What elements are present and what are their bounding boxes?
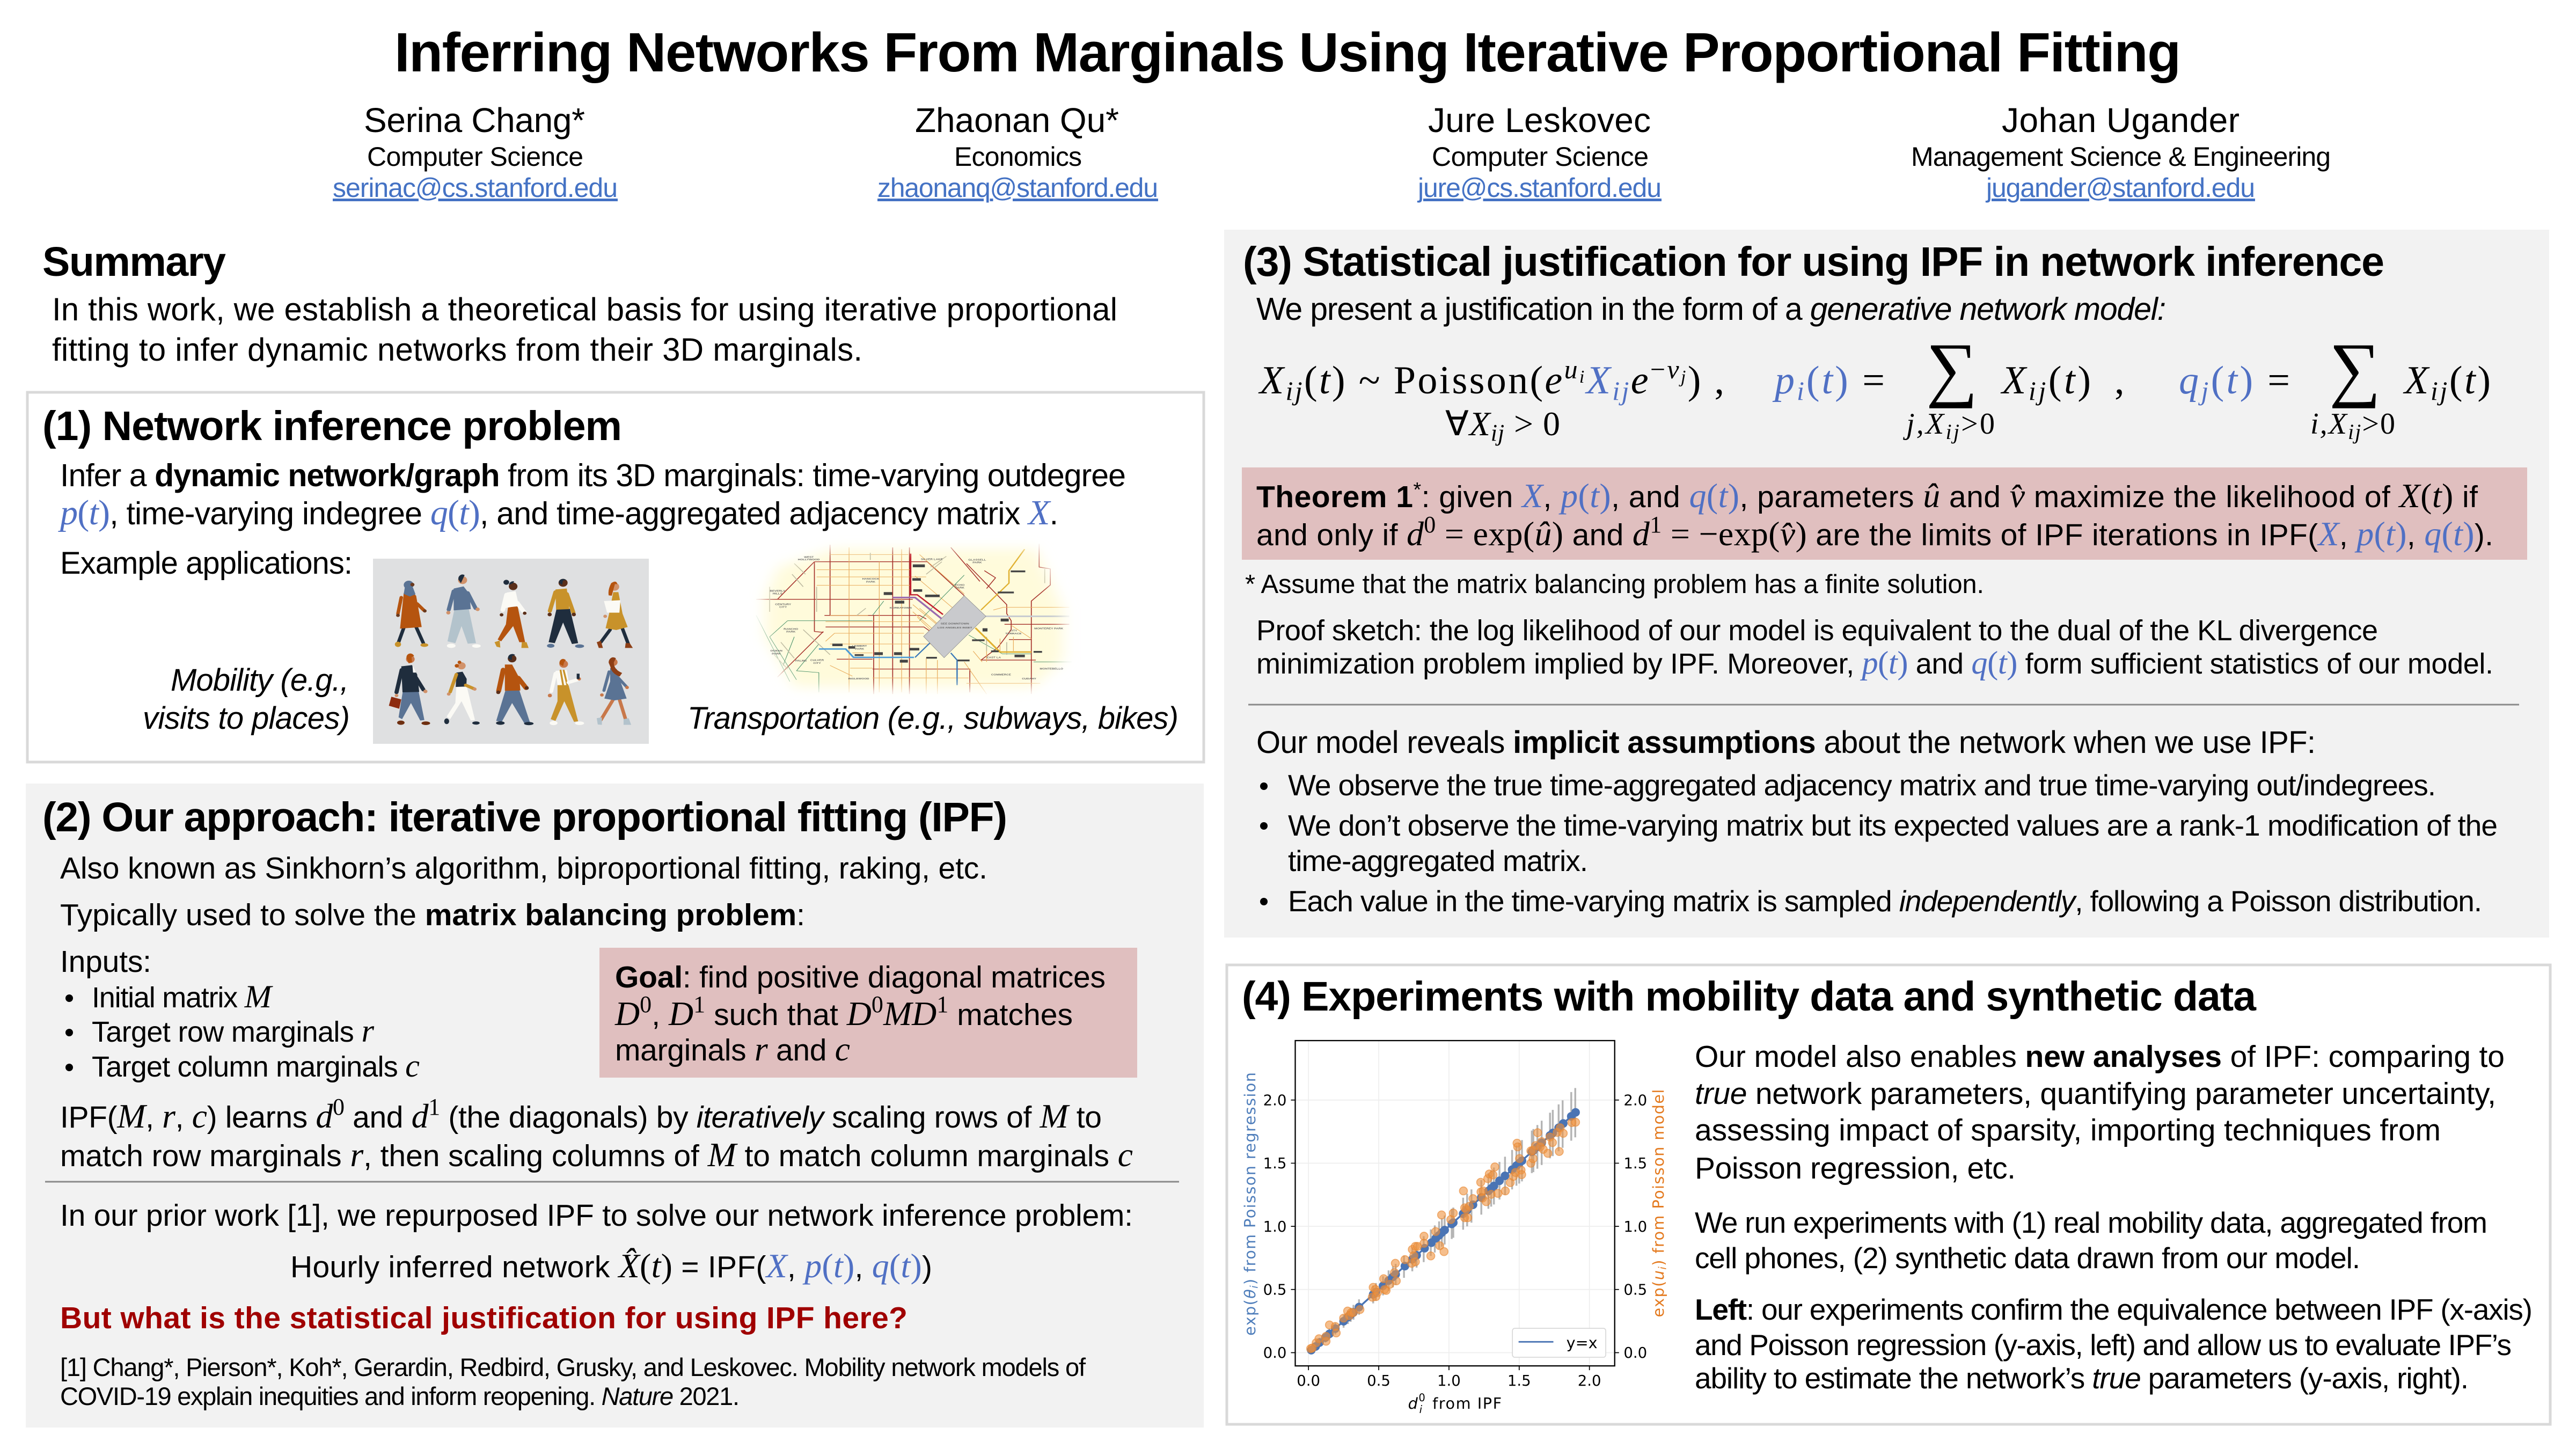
equation: Poisson model: ) , bbox=[1688, 358, 1724, 402]
IPF description: 1 bbox=[428, 1094, 440, 1120]
image: transit map: RANCHO bbox=[784, 628, 799, 631]
image: transit map: CITY bbox=[1009, 630, 1018, 632]
goal callout: 1 bbox=[936, 991, 948, 1018]
matrix balancing intro: Typically used to solve the matrix balancing problem: bbox=[60, 898, 805, 932]
implicit assumptions list: Each value in the time-varying matrix is sampled independently, following a Poisson distribution. bbox=[1288, 884, 2482, 918]
image: transit map: KOREATOWN bbox=[890, 606, 912, 610]
figure 8 bbox=[496, 654, 533, 725]
implicit assumptions list: We observe the true time-aggregated adjacency matrix and true time-varying out/indegrees. bbox=[1288, 769, 2436, 802]
author: Serina Chang: Serina Chang* bbox=[364, 101, 585, 140]
goal callout: D bbox=[846, 994, 872, 1033]
mobility caption: Mobility (e.g., bbox=[171, 663, 349, 698]
description text: Left: our experiments confirm the equivalence between IPF (x-axis) bbox=[1695, 1293, 2533, 1326]
heading: summary: Summary bbox=[42, 239, 226, 285]
equation: Poisson model: X bbox=[1258, 358, 1285, 402]
description text: ability to estimate the network’s true parameters (y-axis, right). bbox=[1695, 1362, 2469, 1395]
description text: Poisson regression, etc. bbox=[1695, 1151, 2016, 1185]
goal callout: Goal: find positive diagonal matrices bbox=[615, 960, 1106, 994]
equation: indegree marginal: t) = bbox=[2227, 358, 2290, 402]
left tick labels: 1.5 bbox=[1263, 1155, 1286, 1172]
equation: indegree marginal: ∑ bbox=[2329, 329, 2381, 409]
description text: We run experiments with (1) real mobility data, aggregated from bbox=[1695, 1206, 2487, 1239]
proof sketch: minimization problem implied by IPF. Moreover, p(t) and q(t) form sufficient statistics of our model. bbox=[1256, 645, 2493, 681]
author: Johan Ugander: Management Science & Engineering bbox=[1911, 142, 2331, 172]
IPF description: IPF(M, r, c) learns d bbox=[60, 1097, 333, 1135]
figure 6 bbox=[389, 654, 430, 725]
problem statement: p(t), time-varying indegree q(t), and time-aggregated adjacency matrix X. bbox=[58, 493, 1058, 532]
left tick labels: 2.0 bbox=[1263, 1092, 1286, 1109]
bottom tick labels: 0.0 bbox=[1297, 1372, 1320, 1389]
theorem footnote: * Assume that the matrix balancing problem has a finite solution. bbox=[1245, 570, 1984, 599]
IPF description bbox=[60, 1094, 1133, 1174]
inputs list: Initial matrix M bbox=[92, 979, 274, 1015]
left tick labels bbox=[1263, 1092, 1286, 1362]
heading: panel 3: (3) Statistical justification for using IPF in network inference bbox=[1243, 239, 2384, 285]
IPF description: 0 bbox=[333, 1094, 345, 1120]
image: transit map: PALMS bbox=[795, 660, 807, 662]
equation: outdegree marginal: >0 bbox=[1961, 407, 1995, 441]
bottom tick labels bbox=[1297, 1372, 1601, 1389]
orange points bbox=[1307, 1118, 1579, 1352]
equation: indegree marginal: t) bbox=[2464, 358, 2491, 402]
description text: Our model also enables new analyses of IPF: comparing to bbox=[1695, 1040, 2505, 1074]
implicit assumptions list bbox=[1260, 769, 2498, 918]
inputs list: Inputs: bbox=[60, 945, 151, 979]
author: Johan Ugander: Johan Ugander bbox=[2002, 101, 2240, 140]
bottom tick labels: 2.0 bbox=[1578, 1372, 1601, 1389]
inputs list: Target column marginals c bbox=[92, 1048, 420, 1084]
figure 9 bbox=[548, 659, 584, 725]
image: transit map: MONTEBELLO bbox=[1040, 668, 1064, 670]
proof sketch: Proof sketch: the log likelihood of our model is equivalent to the dual of the KL divergence bbox=[1256, 614, 2378, 647]
panel: (4) experiments bbox=[1227, 965, 2550, 1424]
figure 3 bbox=[495, 580, 529, 648]
equation: Poisson model: − bbox=[1650, 354, 1665, 384]
theorem callout: = −exp( bbox=[1662, 515, 1780, 553]
x axis label: i bbox=[1419, 1403, 1423, 1416]
left tick labels: 0.5 bbox=[1263, 1282, 1286, 1299]
heading: panel 1: (1) Network inference problem bbox=[42, 403, 622, 449]
summary text bbox=[52, 291, 1117, 368]
equation: indegree marginal: ij bbox=[2348, 420, 2361, 444]
right y axis label: exp(u bbox=[1649, 1270, 1667, 1317]
equation: Poisson model: v bbox=[1667, 354, 1679, 384]
equation: Poisson model: ij bbox=[1286, 376, 1302, 406]
equation: outdegree marginal: ij bbox=[2029, 376, 2046, 406]
equation: Poisson model: ∀X bbox=[1445, 405, 1490, 443]
right tick labels: 1.5 bbox=[1623, 1155, 1647, 1172]
equation: outdegree marginal: t) = bbox=[1822, 358, 1885, 402]
goal callout bbox=[599, 948, 1137, 1078]
blue points bbox=[1311, 1113, 1576, 1350]
equation: indegree marginal: j bbox=[2198, 376, 2208, 406]
equation: outdegree marginal: t) bbox=[2064, 358, 2091, 402]
theorem callout: v̂) are the limits of IPF iterations in IPF(X, p(t), q(t)). bbox=[1780, 515, 2493, 553]
description text: and Poisson regression (y-axis, left) and allow us to evaluate IPF’s bbox=[1695, 1328, 2512, 1362]
bottom tick labels: 1.5 bbox=[1507, 1372, 1531, 1389]
author: Serina Chang: Computer Science bbox=[367, 142, 583, 172]
image: transit map: PARK bbox=[772, 653, 781, 655]
also known as: Also known as Sinkhorn’s algorithm, biproportional fitting, raking, etc. bbox=[60, 851, 987, 885]
left y axis label: exp(θ bbox=[1241, 1289, 1259, 1336]
reference: [1] Chang*, Pierson*, Koh*, Gerardin, Redbird, Grusky, and Leskovec. Mobility network models of bbox=[60, 1353, 1086, 1381]
figure 4 bbox=[547, 579, 584, 648]
description text: true network parameters, quantifying parameter uncertainty, bbox=[1695, 1077, 2496, 1111]
author: Johan Ugander: jugander@stanford.edu bbox=[1985, 173, 2255, 203]
goal callout: 1 bbox=[693, 991, 705, 1018]
goal callout: D bbox=[614, 994, 640, 1033]
panel: (2) our approach bbox=[26, 784, 1204, 1428]
author: Jure Leskovec: jure@cs.stanford.edu bbox=[1417, 173, 1662, 203]
axis ticks bbox=[1291, 1100, 1619, 1370]
figure 7 bbox=[444, 661, 480, 724]
equation: indegree marginal: >0 bbox=[2362, 407, 2395, 441]
image: transit map: PARK bbox=[855, 648, 865, 650]
author: Zhaonan Qu: Zhaonan Qu* bbox=[915, 101, 1119, 140]
author: Jure Leskovec bbox=[1417, 101, 1662, 203]
image: transit map bbox=[756, 544, 1072, 694]
image: transit map: BEVERLY bbox=[770, 590, 785, 592]
error bars bbox=[1311, 1088, 1575, 1354]
goal callout: matches bbox=[948, 998, 1073, 1032]
prior work: In our prior work [1], we repurposed IPF to solve our network inference problem: bbox=[60, 1198, 1133, 1233]
image: transit map: TERRACE bbox=[1005, 632, 1022, 635]
scatter chart bbox=[1241, 1041, 1669, 1416]
goal callout: , bbox=[652, 998, 669, 1032]
author: Serina Chang bbox=[333, 101, 618, 203]
image: transit map: GLASSELL bbox=[968, 559, 986, 561]
equation: Poisson model: u bbox=[1564, 354, 1578, 384]
right y axis label: ) from Poisson model bbox=[1649, 1089, 1667, 1266]
equation: outdegree marginal: ( bbox=[2048, 358, 2062, 402]
equation: Poisson model: j bbox=[1679, 367, 1686, 387]
description text: assessing impact of sparsity, importing techniques from bbox=[1695, 1113, 2441, 1147]
figure 5 bbox=[597, 582, 633, 648]
IPF description: (the diagonals) by bbox=[440, 1100, 697, 1135]
equation: outdegree marginal bbox=[1772, 329, 2124, 444]
image: transit map: COMMERCE bbox=[991, 674, 1011, 676]
image: transit map: CUDAHY bbox=[1022, 677, 1036, 680]
problem statement: Infer a dynamic network/graph from its 3D marginals: time-varying outdegree bbox=[60, 458, 1126, 493]
left tick labels: 0.0 bbox=[1263, 1344, 1286, 1362]
image: transit map: SEE DOWNTOWN bbox=[941, 623, 969, 625]
image: transit map: HOLLYWOOD bbox=[798, 558, 819, 561]
equation: indegree marginal: ij bbox=[2431, 376, 2447, 406]
example applications label: Example applications: bbox=[60, 546, 353, 581]
bottom tick labels: 1.0 bbox=[1437, 1372, 1461, 1389]
reference bbox=[60, 1353, 1086, 1410]
y=x line bbox=[1311, 1113, 1575, 1350]
image: transit map: CULVER bbox=[810, 659, 824, 662]
equation: outdegree marginal: ( bbox=[1806, 358, 1820, 402]
theorem callout: = exp( bbox=[1436, 515, 1534, 553]
equation: indegree marginal: i,X bbox=[2310, 407, 2348, 441]
equation: indegree marginal: ( bbox=[2449, 358, 2463, 402]
equation: outdegree marginal: j,X bbox=[1903, 407, 1945, 441]
x axis label: 0 bbox=[1418, 1392, 1425, 1404]
legend bbox=[1512, 1328, 1606, 1357]
author: Jure Leskovec: Computer Science bbox=[1432, 142, 1649, 172]
implicit assumptions intro: Our model reveals implicit assumptions about the network when we use IPF: bbox=[1256, 725, 2316, 760]
theorem callout: * bbox=[1413, 479, 1421, 501]
reference: COVID-19 explain inequities and inform reopening. Nature 2021. bbox=[60, 1382, 740, 1410]
key question: But what is the statistical justification for using IPF here? bbox=[60, 1301, 908, 1335]
figure 2 bbox=[447, 575, 481, 648]
IPF description: iteratively scaling rows of M to bbox=[697, 1097, 1102, 1135]
goal callout: 0 bbox=[872, 991, 883, 1018]
equation: indegree marginal: q bbox=[2179, 358, 2199, 402]
author: Zhaonan Qu: Economics bbox=[954, 142, 1082, 172]
equation: Poisson model: X bbox=[1585, 358, 1612, 402]
image: transit map: CENTURY bbox=[775, 603, 791, 606]
theorem callout: : given bbox=[1422, 480, 1522, 514]
right tick labels: 2.0 bbox=[1623, 1092, 1647, 1109]
image: transit map: CITY bbox=[813, 662, 821, 665]
generative model intro: We present a justification in the form of a generative network model: bbox=[1256, 291, 2166, 327]
theorem callout: and only if d bbox=[1256, 515, 1424, 553]
bottom tick labels: 0.5 bbox=[1367, 1372, 1391, 1389]
image: transit map: HANCOCK bbox=[862, 577, 880, 581]
image: transit map: ECHO bbox=[955, 584, 965, 587]
image: people walking bbox=[373, 559, 649, 744]
left y axis label: ) from Poisson regression bbox=[1241, 1072, 1259, 1285]
heading: panel 4: (4) Experiments with mobility data and synthetic data bbox=[1242, 974, 2257, 1020]
transportation caption: Transportation (e.g., subways, bikes) bbox=[687, 701, 1179, 736]
author: Zhaonan Qu bbox=[877, 101, 1158, 203]
author: Jure Leskovec: Jure Leskovec bbox=[1428, 101, 1651, 140]
image: transit map: PARK bbox=[786, 631, 796, 633]
equation: outdegree marginal: p bbox=[1772, 358, 1795, 402]
equation: Poisson model: i bbox=[1579, 367, 1584, 387]
summary text: fitting to infer dynamic networks from their 3D marginals. bbox=[52, 332, 862, 368]
image: transit map: PARK bbox=[866, 581, 876, 583]
summary text: In this work, we establish a theoretical basis for using iterative proportional bbox=[52, 291, 1117, 327]
goal callout: 0 bbox=[640, 991, 652, 1018]
figure 1 bbox=[395, 581, 428, 647]
x axis label: d bbox=[1408, 1394, 1418, 1413]
theorem callout: 1 bbox=[1650, 511, 1662, 538]
right tick labels bbox=[1623, 1092, 1647, 1362]
image: transit map: LEIMERT bbox=[852, 645, 867, 648]
equation: outdegree marginal: X bbox=[2000, 358, 2028, 402]
equation: Poisson model: e bbox=[1631, 358, 1649, 402]
goal callout: such that bbox=[705, 998, 847, 1032]
IPF description: match row marginals r, then scaling columns of M to match column marginals c bbox=[60, 1136, 1133, 1174]
image: transit map: EAST LA bbox=[986, 656, 1001, 659]
equation: indegree marginal bbox=[2179, 329, 2491, 444]
right y axis label: i bbox=[1657, 1267, 1669, 1270]
panel: summary bbox=[42, 239, 1117, 368]
theorem callout: 0 bbox=[1424, 511, 1436, 538]
image: transit map: LOS ANGELES INSET bbox=[938, 626, 972, 630]
implicit assumptions list: We don’t observe the time-varying matrix but its expected values are a rank-1 modification of the bbox=[1288, 809, 2498, 842]
image: transit map: INGLEWOOD bbox=[848, 677, 869, 680]
right tick labels: 0.5 bbox=[1623, 1282, 1647, 1299]
implicit assumptions list: time-aggregated matrix. bbox=[1288, 844, 1588, 877]
equation: Poisson model: t) ~ Poisson(e bbox=[1319, 358, 1562, 402]
inputs list: Target row marginals r bbox=[92, 1013, 374, 1049]
image: transit map: MONTEREY PARK bbox=[1034, 627, 1064, 630]
author: Zhaonan Qu: zhaonanq@stanford.edu bbox=[877, 173, 1158, 203]
mobility caption: visits to places) bbox=[143, 701, 350, 736]
author: Johan Ugander bbox=[1911, 101, 2331, 203]
image: transit map: SILVER LAKE bbox=[921, 558, 943, 561]
image: transit map: HILLS bbox=[773, 592, 782, 595]
goal callout: marginals r and c bbox=[615, 1030, 850, 1068]
image: transit map: WEST bbox=[804, 556, 814, 559]
theorem callout: X, p(t), and q(t), parameters û and v̂ maximize the likelihood of X(t) if bbox=[1522, 477, 2478, 515]
left y axis label: i bbox=[1248, 1285, 1260, 1289]
figure 10 bbox=[597, 657, 631, 725]
equation: Poisson model: > 0 bbox=[1505, 405, 1560, 443]
equation: outdegree marginal: ∑ bbox=[1926, 329, 1978, 409]
equation: outdegree marginal: , bbox=[2114, 358, 2124, 402]
equation: Poisson model: ij bbox=[1612, 376, 1629, 406]
proof sketch bbox=[1256, 614, 2493, 681]
description text: cell phones, (2) synthetic data drawn from our model. bbox=[1695, 1241, 2360, 1275]
hourly inferred network equation: Hourly inferred network X̂(t) = IPF(X, p(t), q(t)) bbox=[290, 1247, 932, 1285]
equation: outdegree marginal: ij bbox=[1945, 420, 1959, 444]
title: Inferring Networks From Marginals Using Iterative Proportional Fitting bbox=[394, 21, 2181, 83]
inputs list bbox=[60, 945, 420, 1084]
IPF description: and bbox=[345, 1100, 412, 1135]
image: transit map: PARK bbox=[972, 561, 982, 564]
equation: indegree marginal: X bbox=[2403, 358, 2430, 402]
description text bbox=[1695, 1040, 2533, 1395]
heading: panel 2: (2) Our approach: iterative proportional fitting (IPF) bbox=[42, 794, 1007, 840]
image: transit map: OCEAN bbox=[770, 649, 782, 653]
x axis label: from IPF bbox=[1426, 1394, 1502, 1413]
right tick labels: 1.0 bbox=[1623, 1218, 1647, 1235]
problem statement bbox=[58, 458, 1126, 532]
left tick labels: 1.0 bbox=[1263, 1218, 1286, 1235]
theorem callout bbox=[1242, 467, 2527, 560]
goal callout: MD bbox=[883, 994, 936, 1033]
panel: (3) statistical justification bbox=[1224, 230, 2549, 938]
goal callout: D bbox=[668, 994, 693, 1033]
legend: y=x bbox=[1567, 1334, 1598, 1352]
equation: outdegree marginal: i bbox=[1797, 376, 1804, 406]
image: transit map: CITY bbox=[779, 606, 787, 609]
panel: (1) network inference problem bbox=[27, 392, 1204, 762]
equation: Poisson model: ( bbox=[1304, 358, 1318, 402]
equation: indegree marginal: ( bbox=[2211, 358, 2224, 402]
authors bbox=[333, 101, 2331, 203]
equation: Poisson model: ij bbox=[1491, 420, 1504, 446]
equation: Poisson model bbox=[1258, 354, 1724, 446]
IPF description: d bbox=[412, 1097, 429, 1135]
theorem callout: Theorem 1 bbox=[1256, 480, 1413, 514]
author: Serina Chang: serinac@cs.stanford.edu bbox=[333, 173, 618, 203]
right tick labels: 0.0 bbox=[1623, 1344, 1647, 1362]
mobility caption bbox=[143, 663, 350, 736]
theorem callout: û) and d bbox=[1534, 515, 1650, 553]
image: transit map: PARK bbox=[955, 587, 965, 589]
